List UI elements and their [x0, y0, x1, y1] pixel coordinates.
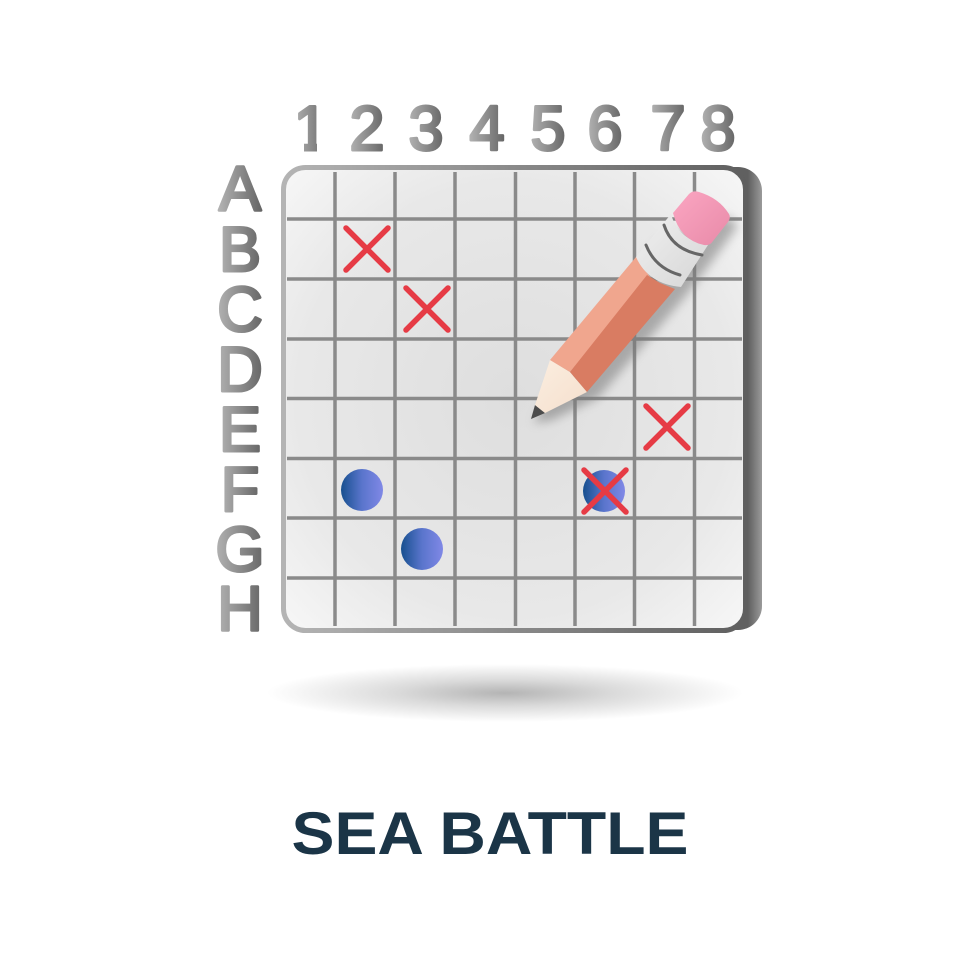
- title: SEA BATTLE: [292, 800, 688, 867]
- row letters: B: [219, 215, 261, 285]
- eraser: [673, 191, 730, 245]
- row letters: D: [217, 335, 263, 405]
- column numbers: 7: [650, 94, 686, 164]
- grid lines: [287, 172, 742, 626]
- row letters: G: [215, 515, 265, 585]
- column numbers: 2: [349, 94, 385, 164]
- column numbers: 8: [700, 94, 736, 164]
- row letters: [215, 154, 265, 644]
- row letters: A: [219, 154, 261, 224]
- red cross C3: [406, 288, 448, 330]
- board back plate: [300, 167, 762, 630]
- blue dot G3: [401, 528, 443, 570]
- sea battle infographic: [217, 104, 762, 854]
- pencil: [531, 191, 738, 423]
- board face: [284, 168, 746, 630]
- wood tip: [535, 360, 587, 413]
- column numbers: 3: [408, 94, 444, 164]
- row letters: C: [217, 275, 263, 345]
- ferrule: [636, 214, 708, 287]
- red cross B2: [346, 228, 388, 270]
- column numbers: 1: [293, 94, 329, 164]
- graphite tip: [531, 405, 545, 419]
- game board: [284, 167, 762, 630]
- pencil shadow: [534, 216, 738, 423]
- row letters: H: [217, 574, 263, 644]
- column numbers: 5: [530, 94, 566, 164]
- ground shadow: [267, 664, 743, 722]
- column numbers: [298, 104, 734, 152]
- ferrule bands: [646, 225, 702, 275]
- light facet: [550, 257, 650, 372]
- blue dot F6: [583, 470, 625, 512]
- column numbers: 6: [587, 94, 623, 164]
- row letters: F: [221, 455, 259, 525]
- red cross F6: [584, 470, 626, 512]
- dark facet: [570, 275, 675, 392]
- red cross E7: [646, 406, 688, 448]
- row letters: E: [219, 395, 261, 465]
- column numbers: 4: [469, 94, 505, 164]
- blue dot F2: [341, 469, 383, 511]
